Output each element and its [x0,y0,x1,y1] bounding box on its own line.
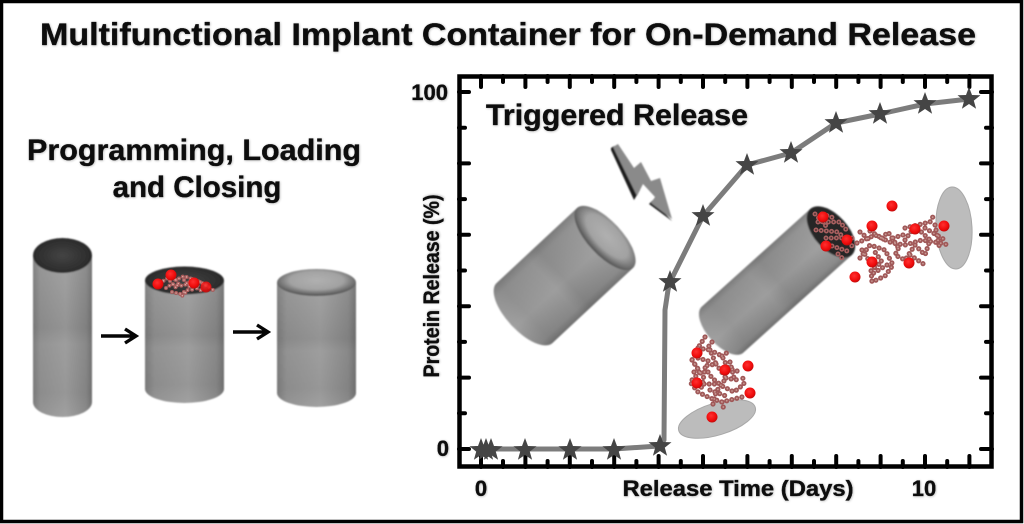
panel: release chart [411,76,992,501]
heading: programming: and Closing [113,171,281,204]
cylinder: empty open container [33,238,92,417]
title: Multifunctional Implant Container for On-Demand Release [40,16,976,52]
x tick label: 0: 0 [475,476,487,501]
protein network in container [160,276,213,296]
protein network: bottom [690,337,744,410]
y axis title: Protein Release (%) [419,194,444,378]
data markers [470,87,980,460]
protein network: right [857,213,949,282]
y tick label: 100: 100 [411,80,448,105]
cylinder: closed container [277,269,356,407]
cylinder: tilted open container [691,198,864,363]
heading: triggered release: Triggered Release [486,99,748,132]
y tick label: 0: 0 [437,436,449,461]
arrow: to closing [233,325,268,339]
protein network: inside container mouth [815,214,856,258]
x axis title: Release Time (Days) [622,476,854,501]
icon: lightning trigger [611,144,672,221]
x tick label: 10: 10 [912,476,936,501]
red protein balls in container [152,270,212,292]
red protein balls: bottom [692,348,756,422]
panel: programming, loading and closing [27,134,361,417]
chart frame and ticks [459,76,992,467]
red protein balls: right [818,200,950,282]
disc: bottom substrate [674,392,760,446]
arrow: to loading [101,329,136,343]
data line [481,99,969,449]
heading: programming: Programming, Loading [27,134,361,167]
cylinder: tilted closed container [483,196,645,355]
disc: right substrate [934,186,974,270]
cylinder: loaded container [145,266,224,403]
